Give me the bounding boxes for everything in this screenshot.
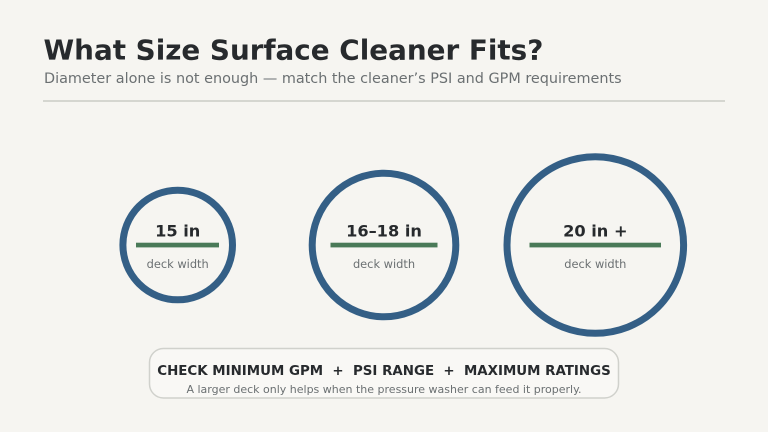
size option: 16–18 in xyxy=(312,173,456,317)
size option: 15 in xyxy=(123,190,232,300)
size option: 15 in: 15 in xyxy=(155,222,200,241)
subtitle: Diameter alone is not enough — match the cleaner’s PSI and GPM requirements xyxy=(44,71,622,87)
title: What Size Surface Cleaner Fits? xyxy=(44,34,543,66)
size option: 15 in: deck width xyxy=(147,257,209,271)
callout: requirements: A larger deck only helps when the pressure washer can feed it properly. xyxy=(186,383,582,396)
size option: 20 in +: deck width xyxy=(564,257,626,271)
size option: 20 in +: 20 in + xyxy=(563,222,628,241)
callout: requirements xyxy=(150,348,618,398)
callout: requirements: CHECK MINIMUM GPM + PSI RANGE + MAXIMUM RATINGS xyxy=(157,364,611,379)
size option: 16–18 in: deck width xyxy=(353,257,415,271)
size option: 20 in + xyxy=(507,157,684,333)
size option: 16–18 in: 16–18 in xyxy=(346,222,422,241)
